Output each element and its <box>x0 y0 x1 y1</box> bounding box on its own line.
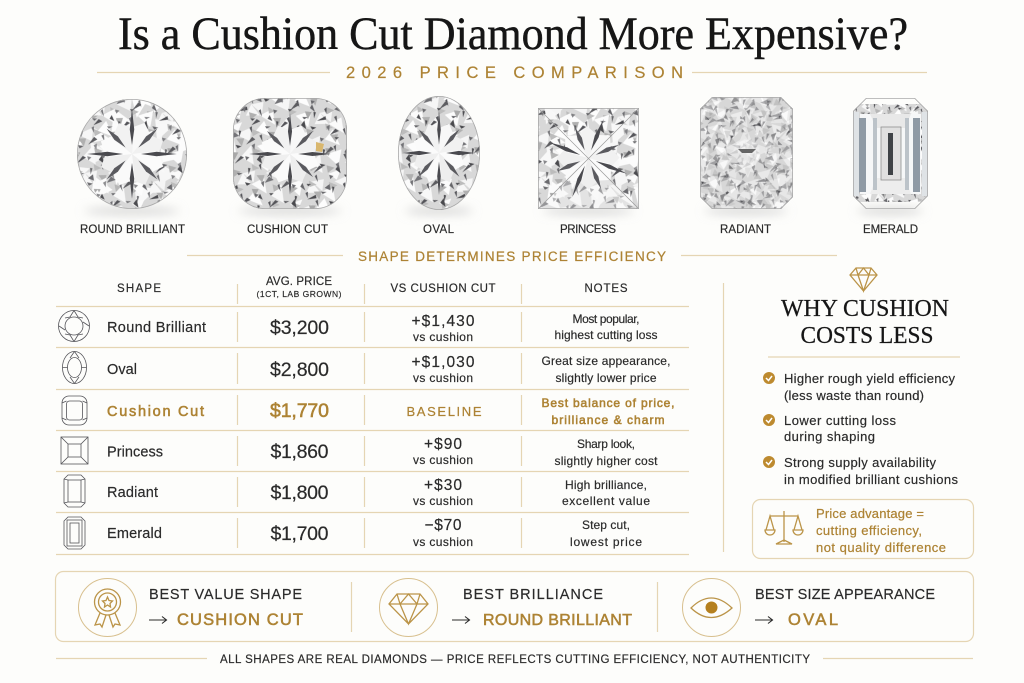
row: radiant <box>64 475 650 508</box>
best size appearance: OVAL <box>788 611 838 629</box>
icon: diamond <box>850 268 877 291</box>
row: princess: vs cushion <box>413 453 473 467</box>
row: radiant: High brilliance, <box>565 478 647 492</box>
callout: price advantage <box>752 500 974 558</box>
best brilliance <box>380 578 632 636</box>
row: radiant: vs cushion <box>413 494 473 508</box>
best value shape: BEST VALUE SHAPE <box>149 587 302 603</box>
row: emerald <box>64 517 642 549</box>
diamond: radiant <box>700 97 793 234</box>
subtitle: 2026 price comparison: 2026 PRICE COMPARISON <box>346 64 683 82</box>
row: cushion cut (highlighted): Cushion Cut <box>107 404 204 420</box>
reasons list <box>763 371 958 487</box>
reasons list: Strong supply availability <box>784 455 936 470</box>
row: cushion cut (highlighted): Best balance of price, <box>542 396 674 410</box>
best value shape <box>78 578 303 636</box>
row: princess: Princess <box>107 444 163 460</box>
diamond: round brilliant: ROUND BRILLIANT <box>80 224 185 236</box>
best size appearance: BEST SIZE APPEARANCE <box>755 587 935 603</box>
callout: price advantage: Price advantage = <box>816 506 924 521</box>
arrow <box>755 616 772 624</box>
row: princess: slightly higher cost <box>554 454 658 468</box>
best value shape: CUSHION CUT <box>177 611 303 629</box>
heading: why cushion costs less: WHY CUSHION <box>781 295 949 322</box>
reasons list: Higher rough yield efficiency <box>784 371 956 386</box>
comparison table <box>56 276 689 554</box>
row: oval: +$1,030 <box>412 354 475 371</box>
row: emerald: lowest price <box>570 535 642 549</box>
row: cushion cut (highlighted): $1,770 <box>270 400 329 422</box>
row: round brilliant <box>58 310 658 344</box>
row: oval: Oval <box>107 362 137 378</box>
row: cushion cut (highlighted): BASELINE <box>406 404 482 419</box>
section heading: shape determines price efficiency: SHAPE DETERMINES PRICE EFFICIENCY <box>358 249 666 264</box>
row: round brilliant: vs cushion <box>413 330 473 344</box>
arrow <box>452 616 470 624</box>
table header: NOTES <box>584 283 628 295</box>
reasons list: during shaping <box>784 429 875 444</box>
footer note: ALL SHAPES ARE REAL DIAMONDS — PRICE REFLECTS CUTTING EFFICIENCY, NOT AUTHENTICITY <box>220 654 810 666</box>
title: Is a Cushion Cut Diamond More Expensive? <box>118 8 908 60</box>
row: emerald: −$70 <box>424 517 462 534</box>
table header: SHAPE <box>117 283 161 295</box>
table header <box>117 276 628 299</box>
diamond: emerald: EMERALD <box>863 224 918 236</box>
diamond: emerald <box>853 98 928 234</box>
row: radiant: Radiant <box>107 485 158 501</box>
row: emerald: Step cut, <box>582 518 630 532</box>
row: emerald: Emerald <box>107 526 162 542</box>
row: emerald: vs cushion <box>413 535 473 549</box>
diamond: princess: PRINCESS <box>560 224 616 236</box>
row: round brilliant: +$1,430 <box>412 313 475 330</box>
row: round brilliant: $3,200 <box>270 317 329 339</box>
diamond: cushion cut: CUSHION CUT <box>247 224 328 236</box>
panel: best-of summary <box>56 572 974 642</box>
row: cushion cut (highlighted): brilliance & charm <box>552 413 664 427</box>
row: princess: $1,860 <box>270 441 329 463</box>
diamond gallery <box>77 96 928 234</box>
row: radiant: excellent value <box>562 494 650 508</box>
table rules <box>56 284 689 554</box>
row: oval: slightly lower price <box>556 371 657 385</box>
diamond: round brilliant <box>77 99 187 234</box>
icon: scales <box>765 511 803 544</box>
heading: why cushion costs less <box>781 295 949 349</box>
row: round brilliant: Round Brilliant <box>107 320 206 336</box>
row: round brilliant: highest cutting loss <box>554 328 658 342</box>
best size appearance <box>682 578 935 636</box>
reasons list: (less waste than round) <box>784 388 924 403</box>
table header: AVG. PRICE <box>266 276 332 288</box>
row: radiant: $1,800 <box>270 482 329 504</box>
best brilliance: BEST BRILLIANCE <box>463 587 603 603</box>
arrow <box>149 616 166 624</box>
row: oval: $2,800 <box>270 359 329 381</box>
diamond: oval <box>398 96 480 234</box>
diamond: radiant: RADIANT <box>720 224 771 236</box>
diamond: princess <box>538 108 639 234</box>
row: radiant: +$30 <box>424 477 462 494</box>
diamond: cushion cut <box>233 98 347 234</box>
panel: why cushion costs less <box>724 268 974 558</box>
row: oval: vs cushion <box>413 371 473 385</box>
reasons list: Lower cutting loss <box>784 413 896 428</box>
callout: price advantage: not quality difference <box>816 540 946 555</box>
table header: VS CUSHION CUT <box>390 283 496 295</box>
row: cushion cut (highlighted) <box>62 396 674 427</box>
row: princess: Sharp look, <box>577 437 635 451</box>
callout: price advantage: cutting efficiency, <box>816 523 922 538</box>
heading: why cushion costs less: COSTS LESS <box>800 322 934 349</box>
row: princess: +$90 <box>424 436 462 453</box>
reasons list: in modified brilliant cushions <box>784 472 958 487</box>
row: oval <box>62 352 670 385</box>
table header: (1CT, LAB GROWN) <box>256 289 342 299</box>
row: oval: Great size appearance, <box>542 354 670 368</box>
row: emerald: $1,700 <box>270 523 329 545</box>
row: princess <box>61 436 658 468</box>
row: round brilliant: Most popular, <box>572 312 640 326</box>
diamond: oval: OVAL <box>423 224 455 236</box>
best brilliance: ROUND BRILLIANT <box>483 612 632 629</box>
